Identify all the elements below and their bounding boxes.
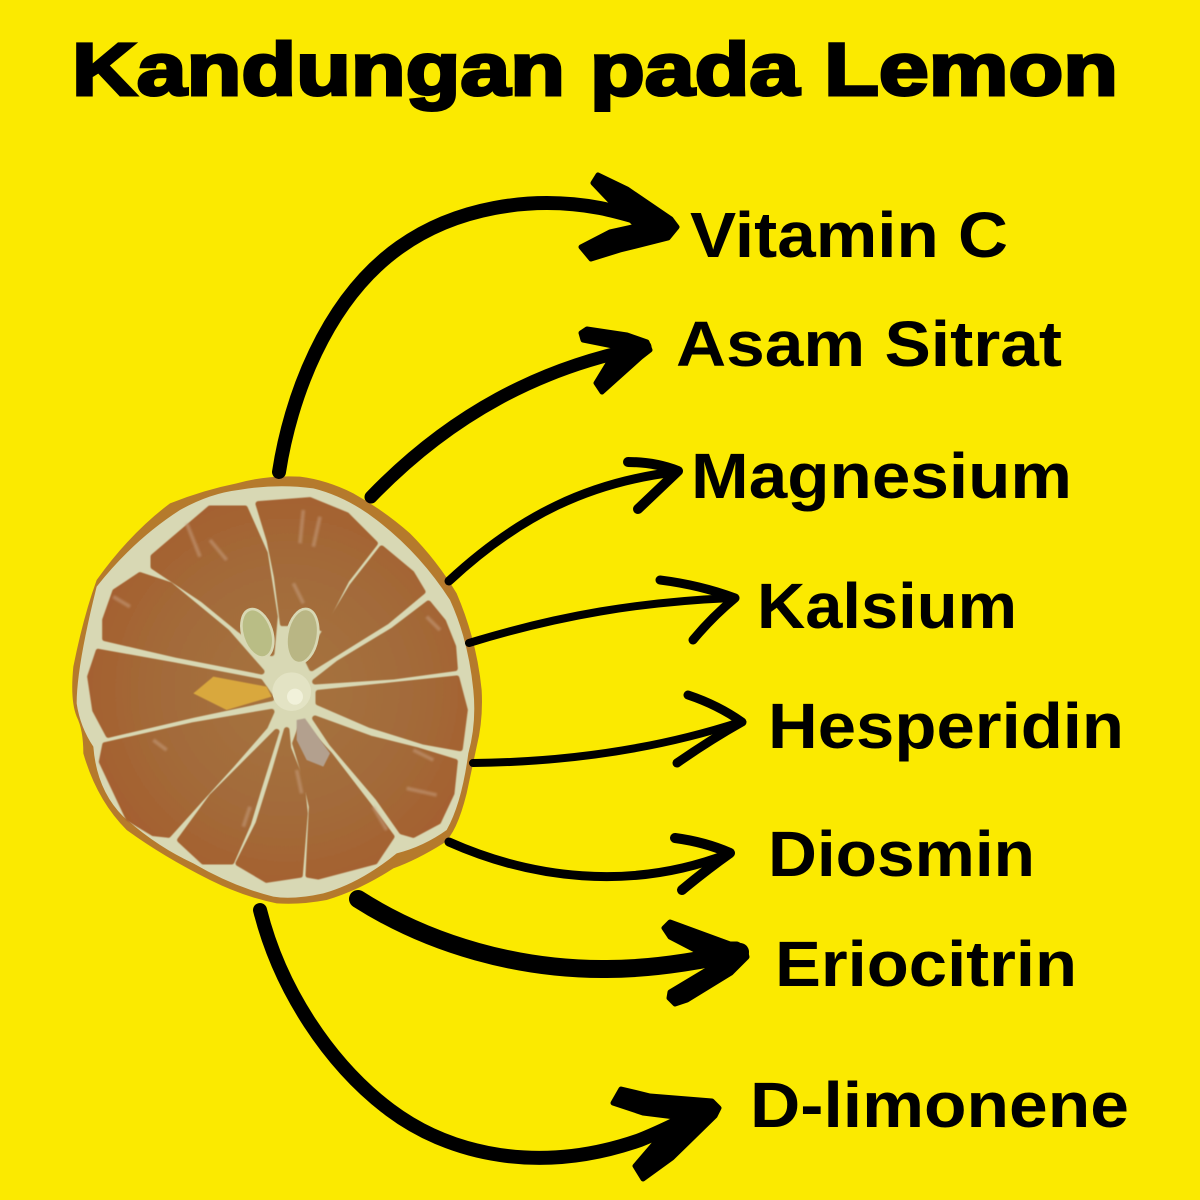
arrow: to Diosmin: [449, 838, 730, 890]
seed: right: [282, 606, 322, 666]
center core: [272, 672, 311, 711]
label: Hesperidin: Hesperidin: [768, 690, 1124, 762]
arrows: [260, 175, 747, 1179]
seed: left: [236, 605, 279, 662]
arrow: to Hesperidin: [473, 695, 742, 763]
arrow: to Asam Sitrat: [371, 329, 650, 497]
arrow: to Kalsium: [469, 580, 735, 643]
label: Asam Sitrat: Asam Sitrat: [676, 308, 1062, 380]
labels: [676, 199, 1129, 1141]
flesh highlights: [113, 510, 440, 830]
arrow: to Eriocitrin: [358, 899, 747, 1004]
seed: grey pit: [297, 718, 330, 767]
icon: dried lemon slice: [72, 476, 482, 904]
label: Eriocitrin: Eriocitrin: [775, 928, 1077, 1000]
seed: yellow pulp: [193, 677, 272, 710]
label: Vitamin C: Vitamin C: [690, 199, 1008, 271]
label: Diosmin: Diosmin: [768, 818, 1035, 890]
title: Kandungan pada Lemon: [72, 28, 1118, 111]
label: Kalsium: Kalsium: [757, 570, 1017, 642]
segments: [90, 500, 465, 880]
label: D-limonene: D-limonene: [750, 1069, 1129, 1141]
label: Magnesium: Magnesium: [691, 440, 1072, 512]
arrow: to D-limonene: [260, 910, 719, 1179]
arrow: to Vitamin C: [279, 175, 677, 472]
arrow: to Magnesium: [449, 462, 678, 581]
